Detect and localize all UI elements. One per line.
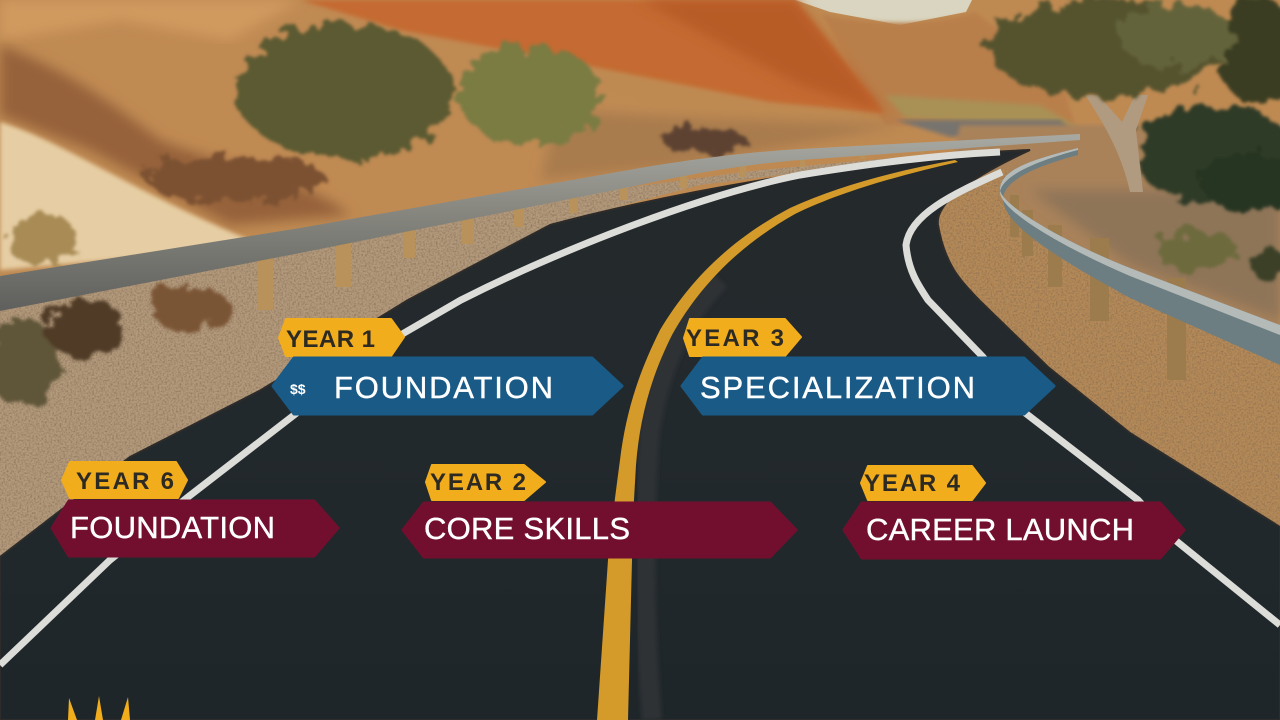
banner (52, 501, 338, 556)
year tag (684, 319, 801, 356)
tree and bushes, right (987, 0, 1280, 280)
year tag (426, 465, 545, 500)
year tag: YEAR 1 (286, 326, 375, 353)
banner: SPECIALIZATION (700, 370, 975, 405)
banner: FOUNDATION (334, 370, 553, 405)
right white edge line (906, 172, 1280, 625)
year tag: YEAR 2 (430, 469, 526, 496)
road lines (0, 152, 1280, 720)
background: desert hills (0, 0, 1280, 340)
banner (273, 358, 622, 414)
guardrail, right (1000, 148, 1280, 380)
tree trunk (1085, 95, 1148, 192)
centre shadow line (645, 280, 720, 720)
banner: $$ (290, 381, 306, 397)
step: Year 3 Specialization (682, 319, 1054, 414)
step: Year 1 Foundation (273, 319, 622, 414)
step: Year 4 Career Launch (844, 466, 1184, 558)
year tag (861, 466, 985, 500)
year tag (62, 462, 187, 498)
banner (682, 358, 1054, 414)
banner: FOUNDATION (70, 510, 275, 545)
banner: CORE SKILLS (424, 511, 630, 546)
bushes on hillside (145, 24, 747, 202)
year tag: YEAR 3 (686, 325, 784, 352)
centre yellow line (597, 160, 958, 720)
banner: CAREER LAUNCH (866, 512, 1134, 547)
icon: partial yellow crown (68, 696, 130, 720)
banner (403, 503, 796, 557)
step: Year 2 Core Skills (403, 465, 796, 557)
right side ground (938, 125, 1280, 540)
year tag: YEAR 4 (864, 470, 961, 497)
roadside scrub, left (0, 214, 230, 406)
sky (795, 0, 972, 25)
tree canopy (987, 0, 1233, 98)
left white edge line (0, 152, 1000, 665)
step: Year 6 Foundation (52, 462, 338, 556)
road surface (0, 150, 1280, 720)
banner (844, 503, 1184, 558)
year tag: YEAR 6 (76, 468, 174, 495)
guardrail, left (0, 134, 1080, 311)
year tag (279, 319, 404, 356)
roadside gravel, left (0, 148, 1000, 557)
